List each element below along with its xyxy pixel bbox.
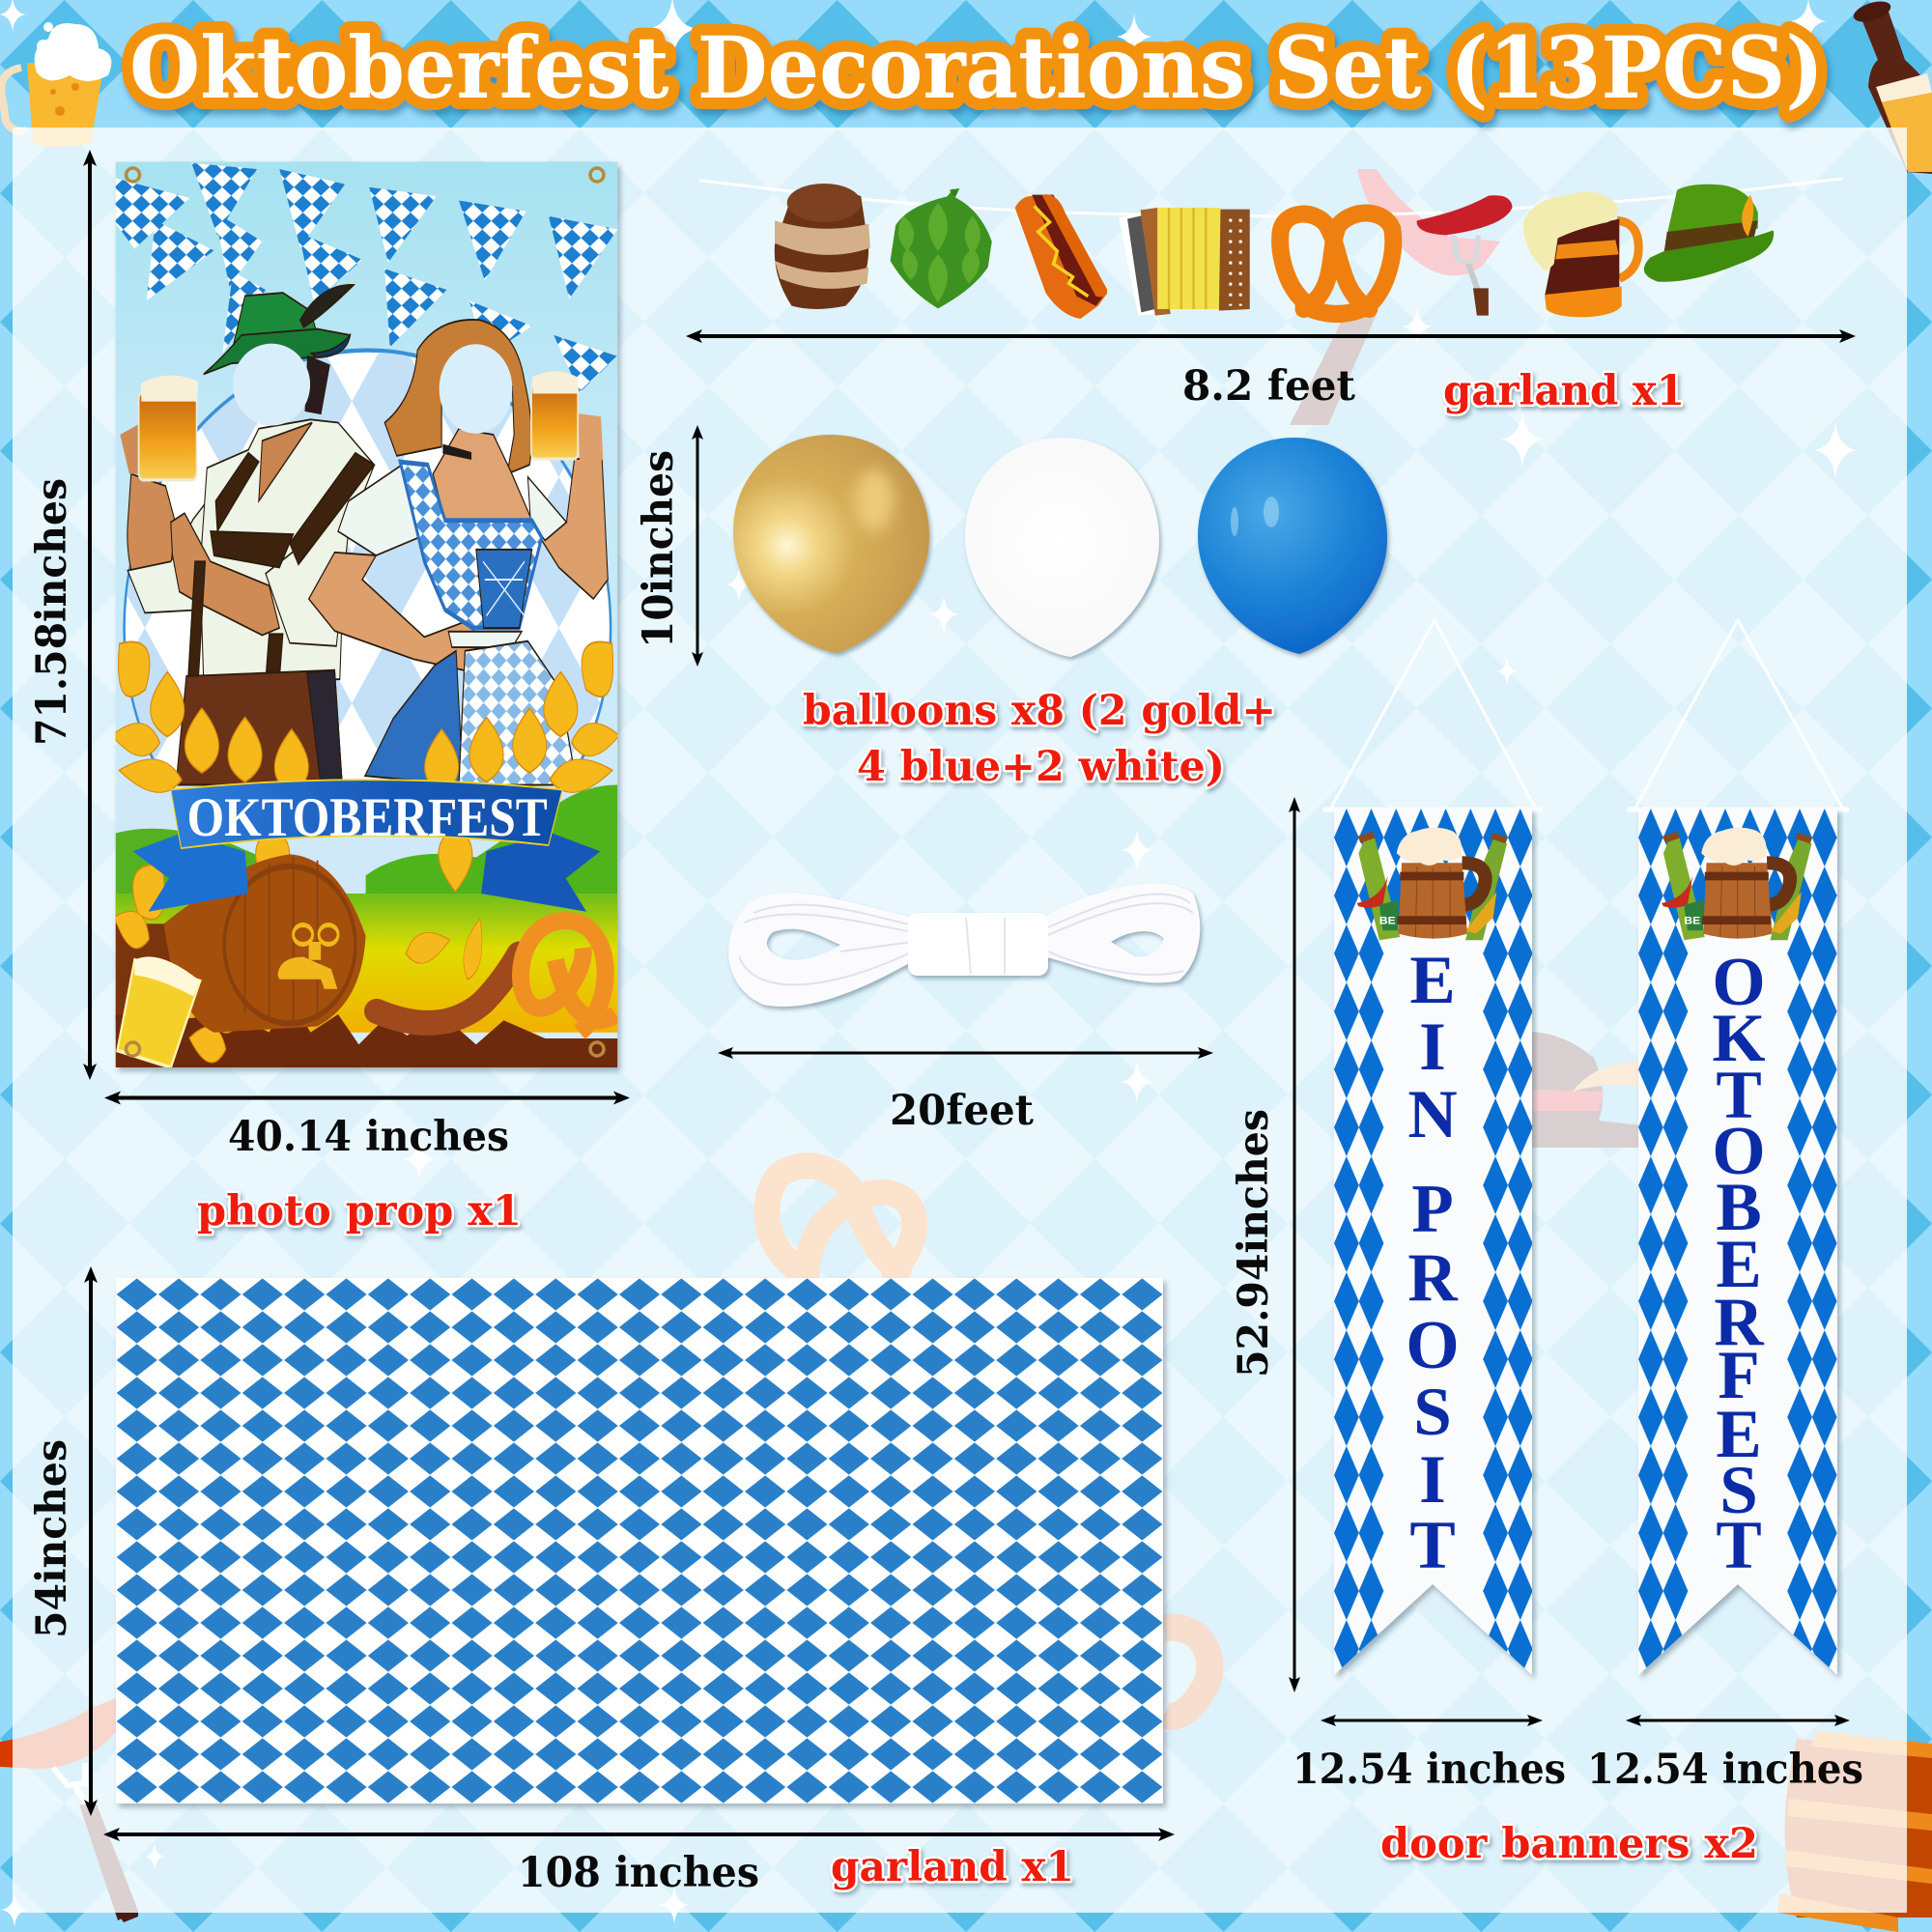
poster woman's beer mug [531,371,603,462]
poster ribbon banner [132,780,600,912]
banner letters: E [1716,1227,1762,1302]
poster grommets [126,168,604,1056]
arrow: tablecloth width [103,1828,1175,1841]
garland: pretzel [1280,213,1393,314]
label: 108 inches: 108 inches [518,1849,759,1897]
label: door banners x2: door banners x2 [1380,1820,1758,1868]
panel: photo prop poster [107,162,624,1067]
title: Oktoberfest Decorations Set (13PCS) [129,17,1824,118]
panel: door banner OKTOBERFEST [1630,620,1847,1688]
poster man [128,285,374,784]
garland: sausage on fork [1417,195,1513,316]
banner letters: K [1712,1001,1766,1076]
balloon: gold [733,435,929,653]
label: 10inches: 10inches [635,450,683,648]
balloon: blue [1198,438,1387,654]
faded decoration: pretzel above tablecloth [767,1166,914,1275]
poster checked circle [123,348,612,779]
banner letters: F [1718,1338,1760,1413]
banner letters: B [1716,1170,1762,1245]
poster man's beer mug [120,376,198,480]
balloon: white [965,438,1159,657]
arrow: left banner width [1321,1715,1543,1726]
banner letters: I [1419,1442,1446,1518]
poster wheat leaves [107,623,624,1066]
banner letters: O [1406,1308,1460,1383]
banner letters: P [1411,1172,1454,1247]
banner letters: O [1712,1114,1766,1189]
decoration: barrel, bottom right [1777,1731,1932,1932]
garland: beer stein [1523,191,1638,317]
garland: accordion [1119,208,1250,316]
banner letters: T [1716,1508,1762,1583]
banner body [1334,809,1532,1675]
arrow: ribbon length [718,1047,1213,1059]
label: 71.58inches: 71.58inches [28,478,76,746]
label: garland x1: garland x1 [1443,367,1685,415]
poster background [116,162,617,1067]
arrow: poster width [104,1092,630,1105]
garland: hot dog [1015,194,1107,319]
arrow: right banner width [1626,1715,1850,1726]
arrow: poster height [83,150,97,1080]
label: photo prop x1: photo prop x1 [197,1187,522,1236]
banner letters: I [1419,1009,1446,1085]
garland: barrel [775,184,870,309]
poster beer mug, bottom left [117,956,200,1067]
label: left banner width: 12.54 inches [1293,1746,1566,1794]
banner letters: E [1716,1397,1762,1472]
label: balloons line two: 4 blue+2 white) [857,743,1225,791]
banner body [1638,809,1837,1675]
poster landscape [116,784,617,1067]
decoration: beer mug, top left [1,22,111,147]
banner rope and dowel [1630,620,1847,810]
label: tablecloth garland x1: garland x1 [831,1843,1074,1891]
label: right banner width: 12.54 inches [1587,1746,1863,1794]
panel: door banner EIN PROSIT [1325,620,1540,1688]
panel: tablecloth [116,1278,1163,1804]
banner letters: R [1714,1285,1764,1360]
label: 54inches: 54inches [28,1439,76,1638]
garland: hop [891,188,992,308]
label: 20feet: 20feet [890,1087,1034,1135]
garland: green hat [1644,185,1774,282]
poster banner text: OKTOBERFEST [187,787,548,849]
faded decoration: sausage on fork behind garland [1290,169,1500,425]
banner letters [1406,943,1460,1583]
poster sausage [377,954,519,1023]
poster woman [309,320,608,784]
decoration: sausage on fork, bottom left [0,1697,138,1922]
garland string [699,179,1842,216]
banner letters: R [1407,1240,1458,1316]
banner letters: N [1407,1077,1458,1152]
title: Oktoberfest Decorations Set (13PCS) [129,17,1824,118]
faded decoration: hat behind banners [1532,1032,1642,1148]
poster face cutouts [233,344,512,434]
arrow: balloon height [692,425,703,667]
arrow: tablecloth height [84,1266,98,1816]
banner diamonds [1334,809,1533,1688]
faded decoration: pretzel beside tablecloth [1164,1628,1209,1717]
label: 8.2 feet: 8.2 feet [1182,362,1355,411]
decoration: beer bottle, top right [1851,0,1932,174]
arrow: garland length [686,329,1856,343]
banner letters: T [1409,1508,1456,1583]
label: 40.14 inches: 40.14 inches [228,1113,509,1161]
banner rope and dowel [1325,620,1540,810]
banner diamonds [1638,809,1837,1688]
banner letters [1712,945,1766,1583]
banner letters: O [1712,945,1766,1020]
poster barrel with tap [164,854,366,1033]
label: 52.94inches: 52.94inches [1230,1109,1278,1378]
poster pretzel [521,921,615,1033]
panel: garland [699,179,1842,319]
arrow: banner height [1289,797,1300,1692]
banner mug icon [1662,828,1812,940]
ribbon roll [728,884,1200,1007]
banner letters: E [1409,943,1456,1018]
poster bunting flags [116,163,617,392]
banner letters: T [1716,1058,1762,1133]
banner letters: S [1719,1453,1758,1528]
banner letters: S [1413,1375,1452,1450]
banner mug icon [1357,828,1508,940]
label: balloons line one: balloons x8 (2 gold+ [803,687,1276,735]
